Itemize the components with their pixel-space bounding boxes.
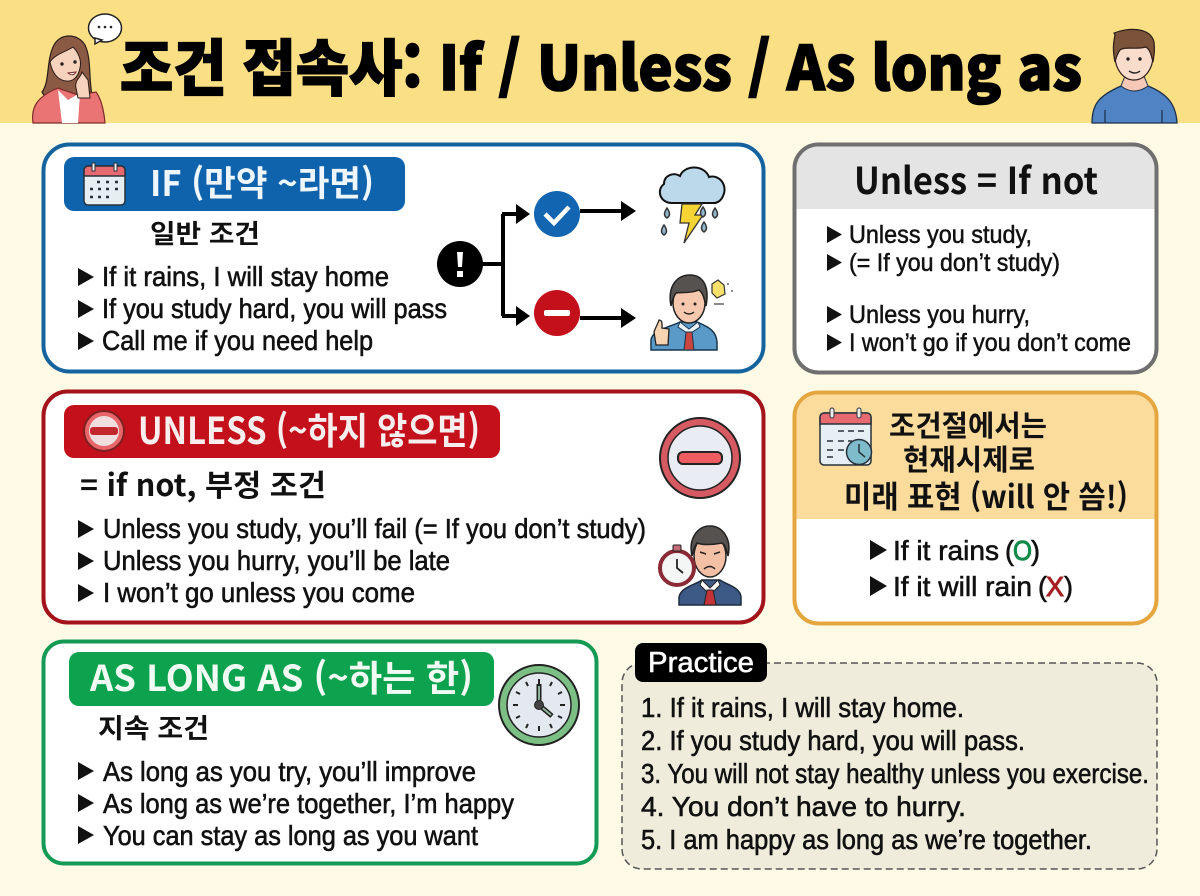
tense note examples: ) — [1031, 535, 1040, 566]
UNLESS examples: Unless you study, you’ll fail (= If you don’t study) — [103, 513, 646, 544]
AS LONG AS heading pill: AS LONG AS (~하는 한) — [89, 650, 473, 702]
Unless examples: (= If you don’t study) — [849, 249, 1060, 277]
tense note heading band — [796, 394, 1154, 519]
Unless heading band — [796, 146, 1154, 209]
IF examples: If it rains, I will stay home — [102, 261, 389, 292]
UNLESS subheading: = if not, 부정 조건 — [80, 461, 326, 505]
tense note examples: ( — [1038, 571, 1048, 602]
tense note heading band: 미래 표현 (will 안 씀!) — [844, 472, 1128, 517]
panel: tense note — [794, 392, 1156, 624]
tense note heading band: 현재시제로 — [903, 437, 1035, 479]
AS LONG AS examples — [78, 756, 514, 851]
icon: calendar with clock — [820, 408, 872, 465]
IF heading pill: IF (만약 ~라면) — [150, 156, 374, 207]
AS LONG AS subheading: 지속 조건 — [98, 707, 209, 746]
IF examples: Call me if you need help — [102, 325, 373, 356]
icon: frustrated man with stopwatch — [660, 526, 741, 605]
title: 조건 접속사: If / Unless / As long as — [120, 19, 1082, 108]
IF subheading: 일반 조건 — [150, 214, 260, 251]
icon: calendar — [84, 163, 125, 205]
practice sentences — [641, 692, 1149, 855]
practice sentences: 5. I am happy as long as we’re together. — [641, 824, 1092, 855]
tense note heading band: 조건절에서는 — [889, 403, 1047, 445]
tense note examples: ( — [1005, 535, 1015, 566]
UNLESS heading pill: UNLESS (~하지 않으면) — [138, 401, 480, 455]
practice sentences: 4. You don’t have to hurry. — [641, 791, 966, 822]
icon: woman thinking with speech bubble — [33, 14, 121, 123]
IF heading pill — [64, 156, 405, 211]
UNLESS examples: Unless you hurry, you’ll be late — [103, 545, 450, 576]
tense note examples: O — [1013, 535, 1032, 566]
IF examples: If you study hard, you will pass — [102, 293, 447, 324]
UNLESS examples — [78, 513, 646, 608]
panel: UNLESS — [44, 392, 764, 622]
Practice label — [635, 643, 767, 682]
Unless heading band: Unless = If not — [854, 151, 1098, 205]
AS LONG AS examples: As long as we’re together, I’m happy — [103, 788, 514, 819]
icon: rain cloud with lightning — [660, 168, 725, 243]
icon: man smiling — [1092, 29, 1177, 123]
practice sentences: 1. If it rains, I will stay home. — [641, 692, 964, 723]
UNLESS examples: I won’t go unless you come — [103, 577, 415, 608]
panel: Unless = If not — [794, 144, 1156, 372]
AS LONG AS examples: You can stay as long as you want — [103, 820, 478, 851]
panel: AS LONG AS — [44, 642, 596, 864]
tense note examples: X — [1046, 571, 1064, 602]
Unless examples: Unless you hurry, — [849, 301, 1030, 329]
AS LONG AS examples: As long as you try, you’ll improve — [103, 756, 476, 787]
header banner — [0, 0, 1200, 123]
tense note examples: ) — [1064, 571, 1073, 602]
flow diagram: condition branches — [437, 191, 636, 336]
Practice label: Practice — [648, 647, 754, 679]
tense note examples — [870, 535, 1073, 602]
tense note examples: If it will rain — [893, 571, 1032, 602]
icon: man with thumbs up — [651, 275, 732, 350]
panel: Practice — [622, 643, 1157, 869]
Unless examples: Unless you study, — [849, 221, 1032, 249]
tense note examples: If it rains — [893, 535, 999, 566]
icon: no-entry sign — [660, 418, 740, 498]
practice sentences: 2. If you study hard, you will pass. — [641, 725, 1025, 756]
panel: IF — [44, 144, 764, 372]
icon: clock — [499, 665, 579, 745]
IF examples — [78, 261, 447, 356]
Unless examples — [827, 221, 1131, 357]
Unless examples: I won’t go if you don’t come — [849, 329, 1131, 357]
